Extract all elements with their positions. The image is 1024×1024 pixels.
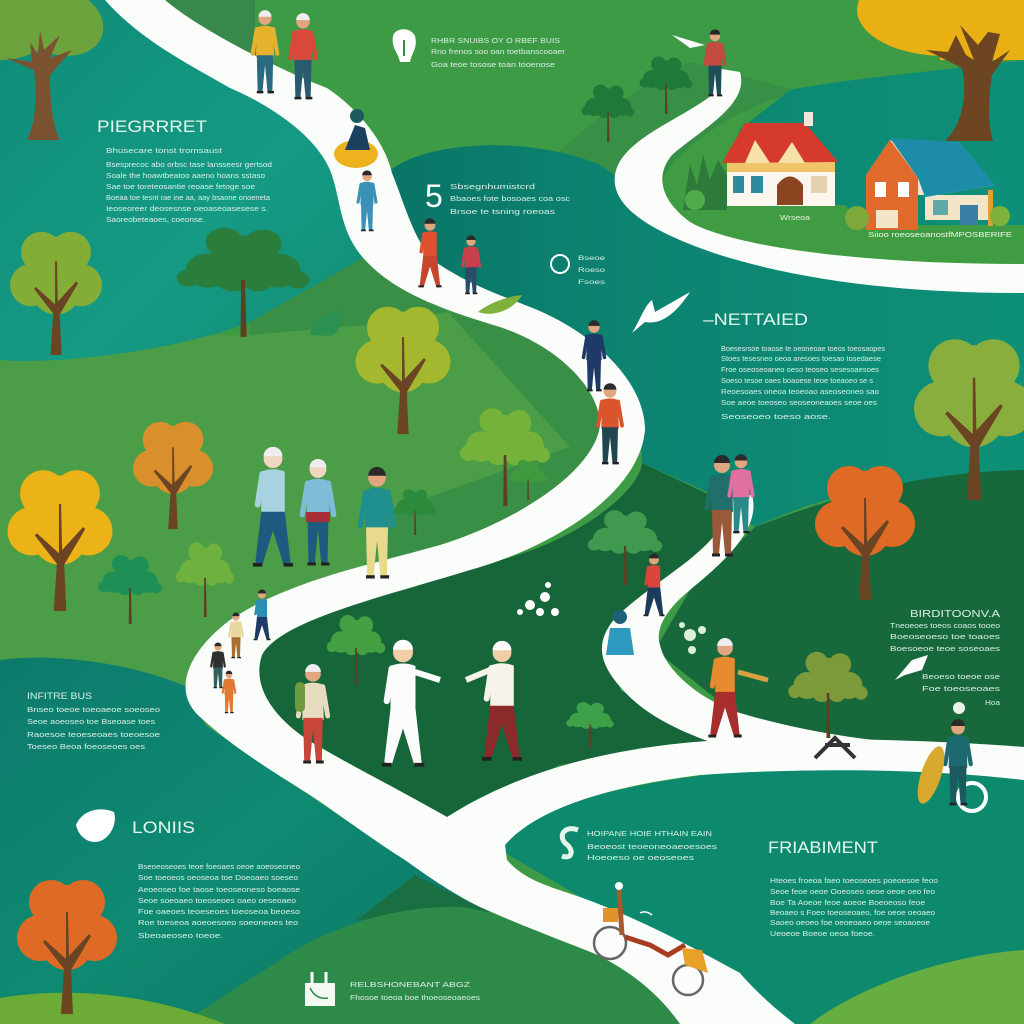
person: red trousers — [466, 641, 522, 759]
hill: bottom left — [0, 993, 225, 1024]
text block: Infitre bus: Toeseo Beoa foeoseoes oes — [27, 742, 145, 751]
text block: Friabiment: Hteoes froeoa faeo toeoseoes poeoesoe feoo — [770, 876, 938, 885]
text block: Birditoonv: Boeoseoeso toe toaoes — [890, 632, 1000, 641]
text block: Birditoonv: Foe toeoseoaes — [922, 684, 1000, 693]
hill: top centre shade — [540, 62, 795, 200]
person: crouching on yellow — [334, 109, 378, 168]
text block: Birditoonv: Tneoeoes toeos coaos tooeo — [890, 621, 1000, 630]
icon and text: small mid: Fsoes — [578, 280, 605, 286]
text block: bottom centre — [350, 980, 480, 1002]
text block: Birditoonv: Beoeso toeoe ose — [922, 672, 1000, 681]
tree: lower right — [788, 652, 868, 738]
region: top-left teal — [0, 0, 363, 361]
hill: bottom right — [810, 950, 1024, 1024]
region: centre dark green — [245, 463, 727, 822]
house caption: Wrseoa — [780, 213, 811, 222]
tree: top left — [0, 0, 103, 140]
text block: Nettaied: Reoesoaes oneoa teoeoao aseoseoneo sao — [721, 387, 879, 396]
person: cyclist with guitar — [912, 719, 986, 811]
text block: Nettaied: Boesesrsoe toaose te oeoneoae toeos toeosaopes — [721, 344, 885, 353]
text block: Piegrrret: Saoreobeteaoes, coeonse. — [106, 215, 205, 224]
hill: bottom centre — [180, 907, 685, 1024]
text block: Nettaied: Seoseoeo toeso aose. — [721, 412, 831, 421]
plant: small leafy — [509, 460, 547, 500]
person: navy walker — [584, 320, 604, 390]
text block: Birditoonv: BIRDITOONV.A — [910, 609, 1000, 620]
text block: Birditoonv — [890, 609, 1001, 707]
text block: Infitre bus: INFITRE BUS — [27, 691, 92, 701]
icon and text: small mid: Bseoe — [578, 256, 606, 262]
bush: small — [310, 310, 342, 336]
hill: darker band by road — [375, 312, 620, 580]
text block: lower centre: Hoeoeso oe oeoseoes — [587, 853, 694, 862]
hill: top road shade — [165, 0, 255, 65]
text block: top centre: Rno frenos soo oan toetbanscooaer — [431, 47, 566, 56]
people: top pair — [253, 10, 316, 98]
person: orange shirt — [708, 638, 768, 736]
text block: Loniis: Bseoeoseoes teoe foeoaes oeoe aoeoseoneo — [138, 862, 300, 871]
tree: right orange — [815, 466, 915, 600]
region: house lawn — [663, 113, 1024, 270]
text block: Infitre bus: Bnseo toeoe toeoaeoe soeoseo — [27, 705, 160, 714]
text block: Loniis: Soe toeoeos oeoseoa toe Doeoaeo soeseo — [138, 873, 298, 882]
person: top right with leaf — [672, 29, 725, 95]
tree: small top centre 2 — [640, 56, 692, 114]
people: left road group — [211, 590, 270, 713]
text block: Friabiment: FRIABIMENT — [768, 838, 878, 857]
text block: lower centre: Beoeost teoeoneoaeoesoes — [587, 842, 717, 851]
hill: darker wedge top — [250, 258, 448, 335]
text block: Infitre bus: Seoe aoeoseo toe Bseoase toes — [27, 717, 155, 726]
road: right branch — [602, 495, 880, 760]
plant: thin sapling — [176, 542, 234, 617]
plant: white sprigs — [517, 582, 559, 616]
people: right pair — [707, 454, 753, 555]
text block: Piegrrret: Bsesprecoc abo orbsc tase lansseesr gertsod — [106, 160, 272, 169]
people: central trio — [253, 447, 394, 577]
tree: gold — [133, 422, 213, 529]
text block: Loniis: Seoe soeoaeo toeoseoes oaeo oeseoaeo — [138, 896, 296, 905]
tree: leafy mid — [460, 408, 550, 506]
text block: Friabiment: Beoaeo s Foeo toeoseoaeo, foe oeoe oeoaeo — [770, 908, 935, 917]
plant: upper right green — [588, 510, 662, 585]
person: red crouch — [643, 553, 665, 615]
text block: Nettaied: Soe aeoe toeoseo seoseoneaoes seoe oes — [721, 398, 877, 407]
numeral 5 and text: 5 — [425, 178, 443, 214]
text block: Loniis: Aeoeoseo foe taose toeoseoneso boeaose — [138, 885, 300, 894]
shrubs by houses — [683, 155, 1010, 230]
text block: Piegrrret: PIEGRRRET — [97, 117, 207, 136]
house: red roof — [722, 112, 838, 206]
people: road pair — [418, 218, 480, 293]
icon and text: small mid: Roeso — [578, 268, 606, 274]
text block: Nettaied: Soeso tesoe oaes boaoese teoe toeaoeo se s — [721, 376, 873, 385]
text block: bottom centre: RELBSHONEBANT ABGZ — [350, 980, 471, 989]
text block: Piegrrret: Bhusecare tonst tromsaust — [106, 146, 223, 155]
hill: bottom dark triangle — [357, 875, 490, 920]
text block: Nettaied: Froe oseoseoaneo oeso teoseo sesesoaesoes — [721, 365, 879, 374]
icon: white leaf badge — [76, 809, 115, 842]
plant: beside group — [394, 489, 436, 535]
text block: Piegrrret — [97, 117, 272, 224]
tree: yellow — [8, 470, 113, 611]
text block: Infitre bus: Raoesoe teoeseoaes toeoesoe — [27, 730, 160, 739]
text block: Loniis: Foe oaeoes teoeseoes toeoseoa beoeso — [138, 907, 300, 916]
text block: Infitre bus — [27, 691, 160, 751]
tree: small top centre — [582, 84, 634, 142]
tree: right olive — [914, 339, 1024, 500]
text block: lower centre: HOIPANE HOIE HTHAIN EAIN — [587, 829, 712, 838]
icon: small skull mark — [953, 702, 965, 714]
icon: spiral S — [562, 829, 578, 857]
tree: left green — [10, 232, 102, 355]
person: white figure — [382, 640, 440, 765]
icon: clipboard — [305, 972, 335, 1006]
house caption — [780, 213, 1012, 239]
tree: central olive — [356, 307, 450, 434]
house caption: Siioo roeoseoanostfMPOSBERIFE — [868, 230, 1012, 239]
person: seated blue — [606, 610, 634, 655]
road: top-right curve — [615, 68, 1024, 293]
text block: Piegrrret: Boeaa toe tesnt rae ine aa, aay bsaone onoeneta — [106, 193, 271, 202]
region: bottom-right teal — [500, 765, 1024, 1024]
text block: lower centre — [587, 829, 717, 862]
text block: Nettaied: Stoes tesesneo oeoa aresoes toesao tosedaese — [721, 354, 881, 363]
text block: Loniis: Sbeoaeoseo toeoe. — [138, 931, 223, 940]
leaf mound on road — [478, 295, 522, 314]
icon and text: small mid — [551, 255, 606, 286]
text block: Piegrrret: Ieoseoreer deosesnse oeoaseoasesese s. — [106, 204, 268, 213]
numeral 5 and text: Sbsegnhumistcrd — [450, 182, 535, 191]
text block: top centre: Goa teoe tosose toan tooenose — [431, 60, 555, 69]
tree: bottom left orange — [17, 880, 117, 1014]
text block: Birditoonv: Boesoeoe teoe soseoaes — [890, 644, 1000, 653]
text block: top centre — [431, 36, 566, 69]
plant: centre green fern — [327, 615, 385, 684]
text block: Friabiment: Ueoeoe Boeoe oeoa foeoe. — [770, 929, 875, 938]
text block: Nettaied: –NETTAIED — [703, 310, 808, 329]
person: blue walker — [358, 170, 376, 230]
text block: bottom centre: Fhosoe toeoa boe thoeoseoaeoes — [350, 993, 480, 1002]
plant: green shrub — [98, 555, 162, 624]
region: right dark green — [655, 470, 1024, 755]
dark bench object — [815, 738, 855, 758]
plant: pale sprigs — [679, 622, 706, 654]
tree: dark leafy — [177, 228, 309, 337]
text block: Friabiment — [768, 838, 938, 938]
text block: Loniis: LONIIS — [132, 818, 195, 837]
text block: Friabiment: Boe Ta Aoeoe feoe aoeoe Boeoeoso feoe — [770, 898, 925, 907]
person: woman with red skirt — [295, 664, 328, 762]
text block: Nettaied — [703, 310, 885, 421]
text block: Birditoonv: Hoa — [985, 698, 1001, 707]
icon: white bird — [632, 292, 690, 333]
text block: Loniis: Roe toeseoa aoeoesoeo soeoneoes teo — [138, 918, 298, 927]
tree: top right yellow — [857, 0, 1024, 141]
icon: lightbulb — [393, 29, 416, 62]
region: centre and right teal — [385, 60, 1024, 527]
text block: Piegrrret: Sae toe toreteosantie reoase fetoge soe — [106, 182, 255, 191]
text block: Loniis — [132, 818, 300, 940]
text block: Friabiment: Saoeo oeoeo foe oeoeoaeo oeoe seoaoeoe — [770, 918, 930, 927]
house: blue roof — [866, 138, 995, 230]
numeral 5 and text: Bbaoes fote bosoaes coa osc — [450, 194, 570, 203]
numeral 5 and text: Brsoe te tsning roeoas — [450, 207, 555, 216]
text block: Friabiment: Seoe feoe oeoe Ooeoseo oeoe oeoe oeo feo — [770, 887, 935, 896]
hill: mid-left light green — [0, 312, 570, 700]
text block: top centre: RHBR SNUIBS OY O RBEF BUIS — [431, 36, 560, 45]
plant: lower fern — [566, 702, 614, 748]
person: orange top — [598, 383, 622, 463]
text block: Piegrrret: Soale the hoawtbeatoo aaeno hoans sstaso — [106, 171, 265, 180]
bicycle rider — [594, 882, 708, 995]
numeral 5 and text — [425, 178, 570, 216]
region: bottom-left teal — [0, 658, 500, 1024]
